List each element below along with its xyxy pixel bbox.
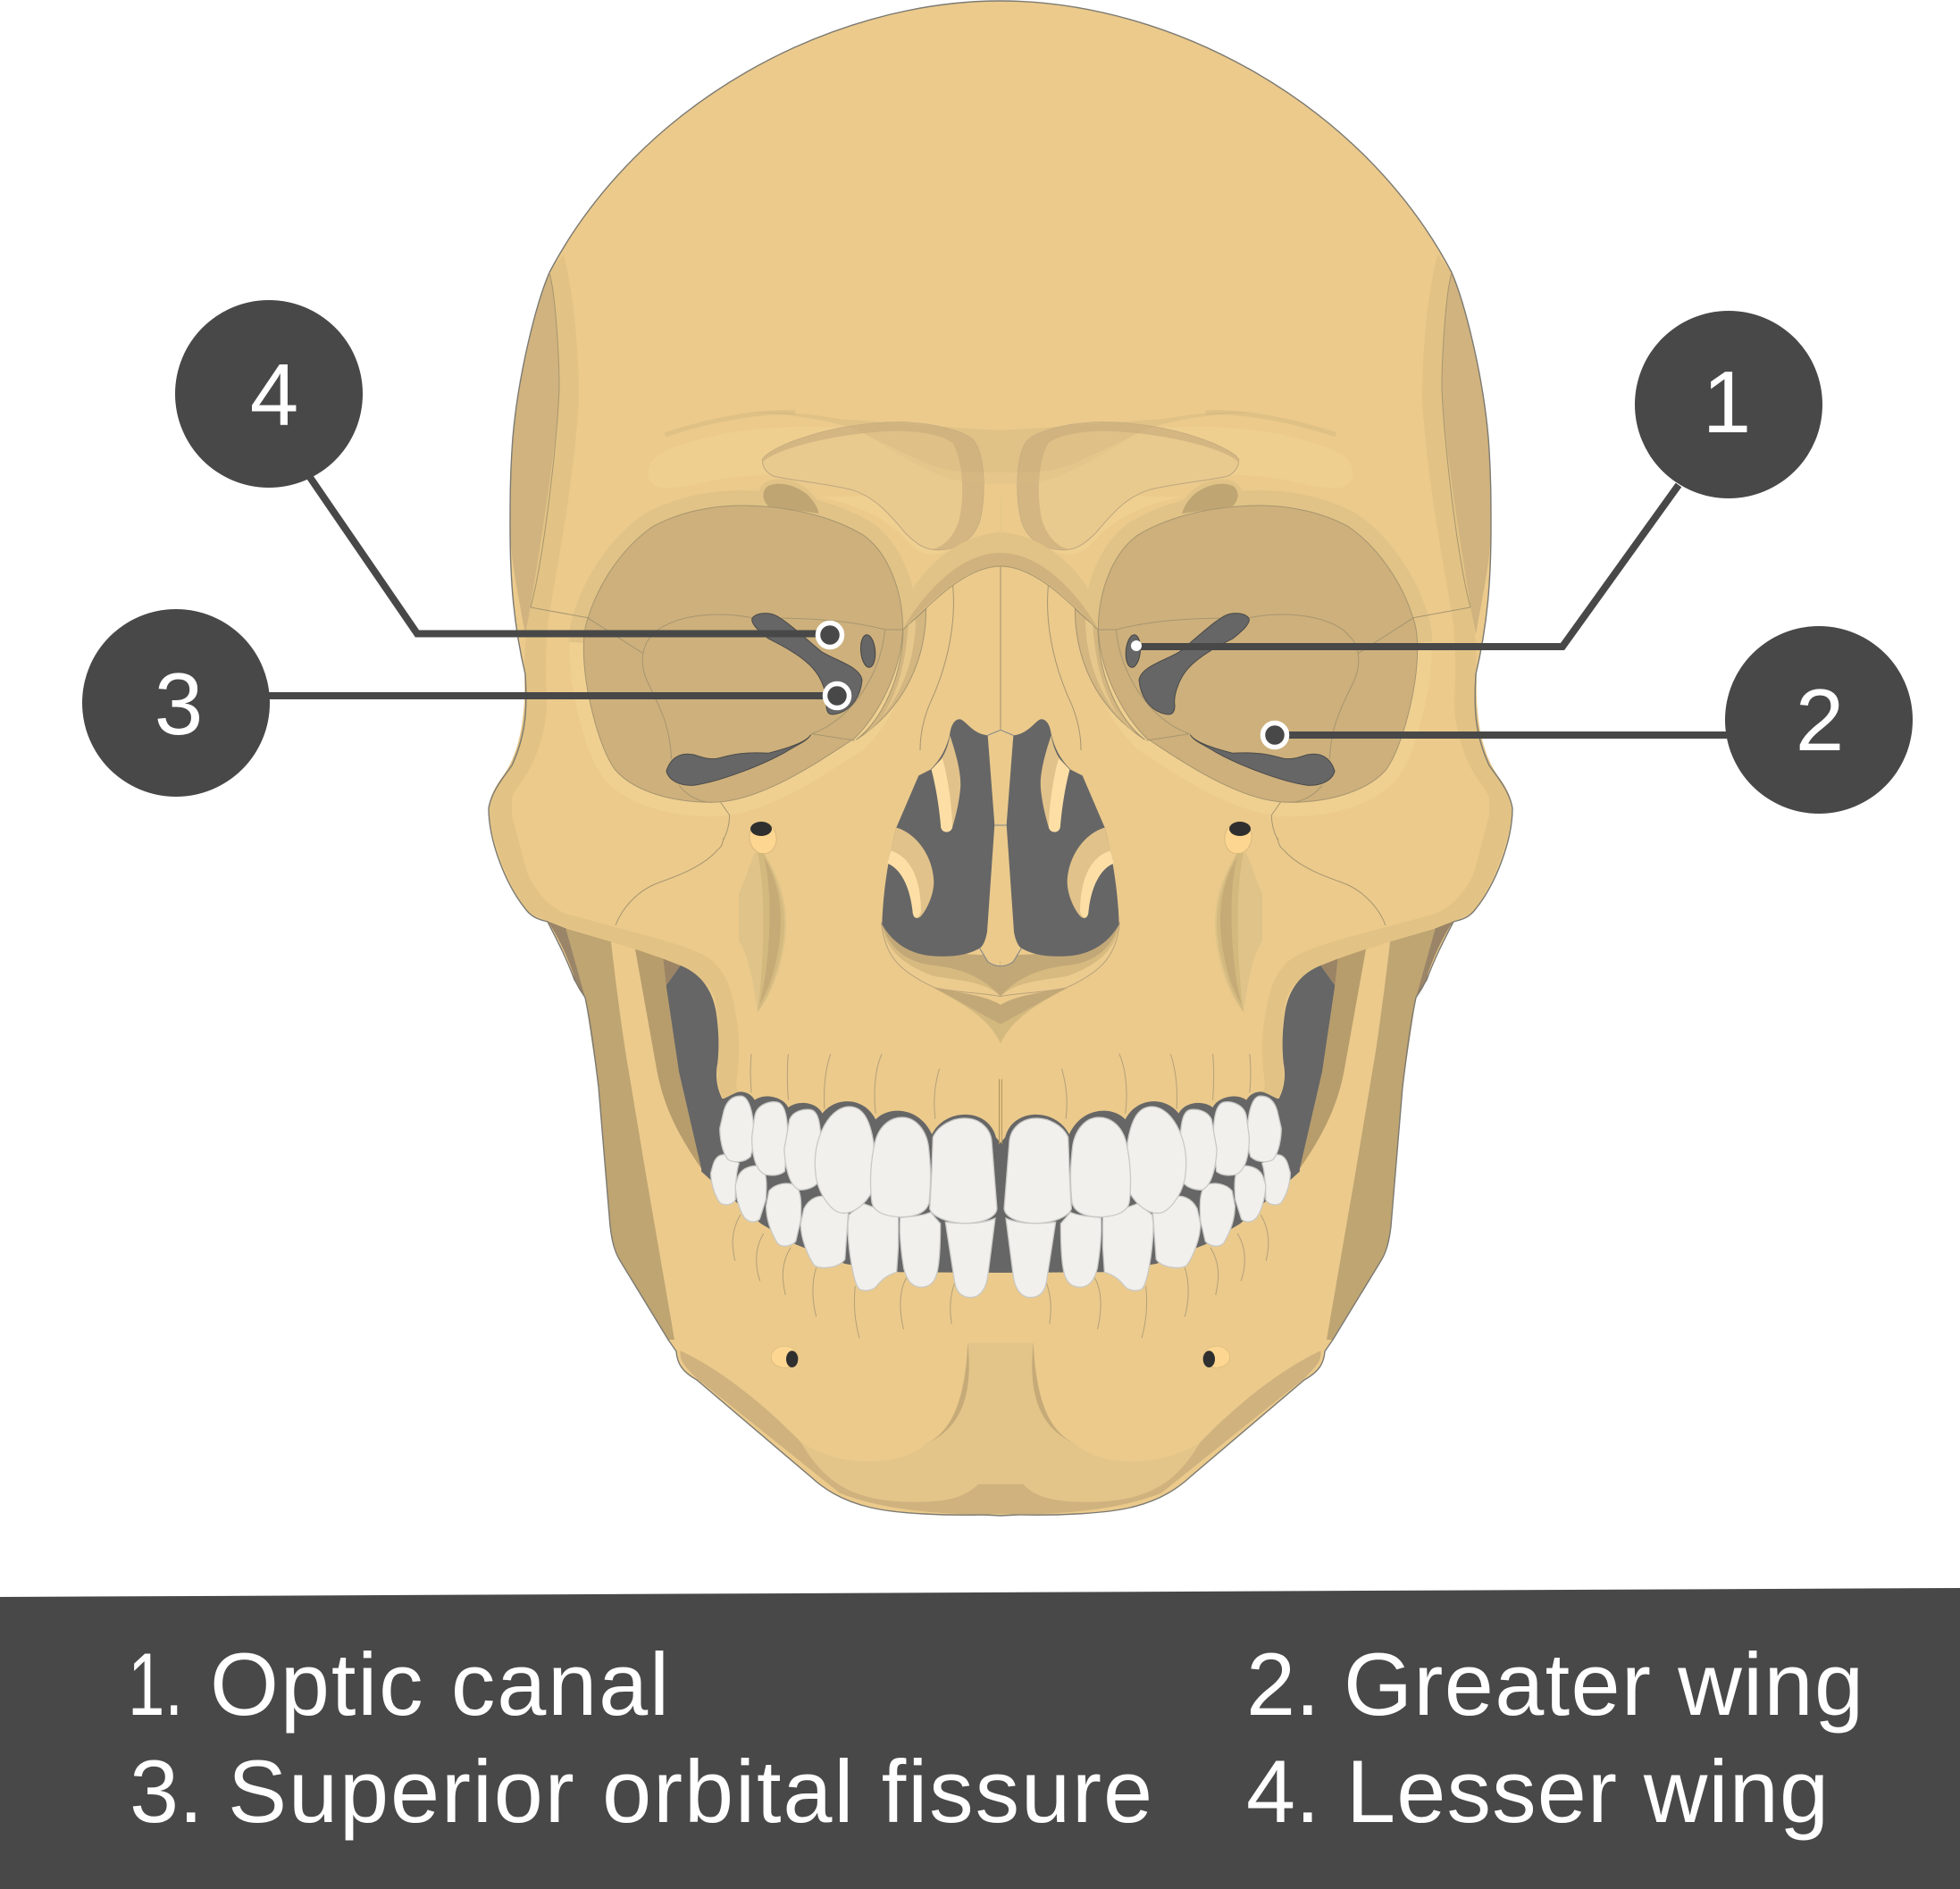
legend item 4: 4.	[1246, 1742, 1320, 1841]
skull: right half, mirrored	[1000, 1, 1512, 1516]
coronoid shading	[635, 949, 701, 1168]
lower incisors	[900, 1212, 995, 1298]
upper concha	[932, 735, 960, 832]
cheek and temple rim band	[489, 255, 740, 1103]
nasal floor shading light	[882, 924, 1001, 997]
superior orbital fissure	[752, 614, 862, 715]
infraorbital foramen	[747, 820, 779, 856]
piriform aperture	[882, 719, 994, 957]
nasion lower line	[903, 566, 1001, 630]
upper rim band	[583, 506, 903, 643]
nasal floor shading dark	[882, 924, 1001, 997]
silhouette outline	[489, 1, 1001, 1516]
callout 1: optic canal: 1	[1703, 353, 1751, 451]
lower alveolar lines	[733, 1215, 954, 1338]
lower concha	[887, 828, 934, 918]
subnasal shadow dark	[934, 988, 1001, 1024]
zygomatic suture	[616, 838, 724, 925]
chin eminence	[801, 1342, 1001, 1502]
nasal spine shading	[882, 923, 1001, 997]
callout 1: optic canal	[1131, 311, 1822, 651]
upper alveolar lines	[750, 1054, 939, 1119]
temple shading	[510, 272, 559, 634]
lower rear teeth and gum cavity	[701, 1054, 1001, 1338]
lower concha highlight	[887, 851, 921, 917]
chin	[680, 1342, 1001, 1514]
legend item 3: 3.	[130, 1742, 204, 1841]
lower side teeth	[711, 1155, 899, 1291]
septum bone base	[980, 938, 1001, 966]
callout 2: greater wing	[1263, 626, 1913, 814]
lower rim highlight	[583, 506, 903, 802]
chin crescent shadow	[926, 1342, 969, 1444]
lacrimal band light	[865, 619, 916, 734]
sphenoid wing outlines	[531, 607, 903, 840]
nasal septum lines	[980, 730, 1001, 966]
nasion arch inner light	[903, 566, 1001, 630]
orbit surround	[583, 506, 903, 802]
optic canal	[859, 634, 876, 668]
cavity behind cheek	[666, 965, 733, 1194]
inferior orbital fissure	[666, 735, 811, 785]
upper concha highlight	[932, 758, 952, 832]
upper front teeth	[871, 1117, 997, 1224]
nasion arch outer band	[903, 532, 1001, 628]
mental foramen	[771, 1346, 798, 1367]
legend item 3: Superior orbital fissure	[228, 1742, 1152, 1841]
legend band	[0, 1588, 1960, 1889]
callout 4: lesser wing	[175, 300, 842, 647]
glabella and nasion	[750, 412, 1001, 750]
glabella crescent shadow	[762, 422, 984, 550]
callout 2: greater wing: 2	[1796, 671, 1844, 769]
orbit	[531, 506, 903, 840]
cranium and jaw silhouette fill	[489, 1, 1001, 1516]
brow overlay band	[750, 412, 1001, 472]
faint upper midline	[1000, 497, 1001, 533]
nasal bone midline	[1000, 566, 1001, 730]
glabella lobe	[762, 422, 984, 550]
brow highlight	[648, 412, 836, 488]
upper side teeth	[720, 1096, 875, 1213]
callout 3: superior orbital fissure	[82, 609, 849, 797]
far back shadow	[548, 922, 585, 998]
orbit cavity	[583, 506, 903, 802]
nasal bone edge	[920, 586, 953, 750]
skull: left half	[489, 1, 1001, 1516]
brow overlay lower	[875, 440, 1001, 484]
nasion arch shadow	[903, 553, 1001, 628]
supraorbital notch band	[758, 479, 825, 518]
legend item 2: Greater wing	[1344, 1634, 1864, 1734]
callout 4: lesser wing: 4	[250, 346, 298, 444]
maxilla midline	[999, 1079, 1001, 1144]
supraorbital notch	[763, 484, 819, 514]
ramus and teeth cavity	[548, 922, 733, 1340]
gum cavity	[701, 1091, 1001, 1273]
glabella highlight strip	[819, 496, 959, 555]
legend item 1: Optic canal	[210, 1634, 669, 1734]
callout 3: superior orbital fissure: 3	[155, 655, 203, 753]
ramus back face	[565, 928, 674, 1340]
legend item 1: 1.	[128, 1634, 183, 1734]
mandible lower border shadow	[680, 1350, 1001, 1514]
subnasal shadow	[934, 988, 1001, 1043]
deep shadow triangle	[663, 958, 681, 985]
canine eminence	[739, 853, 786, 1012]
nose	[882, 719, 1001, 1043]
legend item 2: 2.	[1246, 1634, 1320, 1734]
legend item 4: Lesser wing	[1346, 1742, 1829, 1841]
lacrimal band dark	[856, 609, 926, 740]
temple suture line	[531, 272, 559, 607]
